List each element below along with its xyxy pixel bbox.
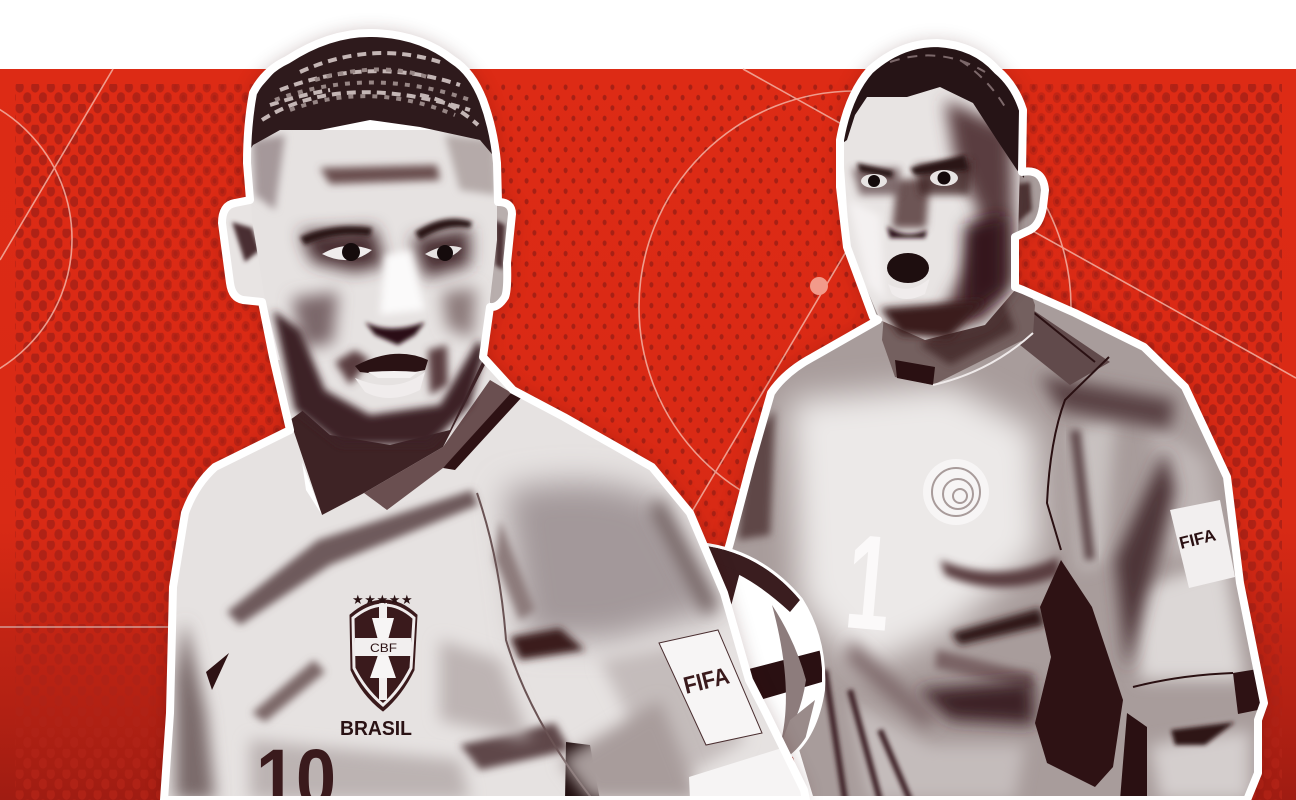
CBF crest: CBF [370,641,397,655]
FIFA patch right [1170,500,1235,588]
FIFA patch right: FIFA [1177,526,1218,553]
CBF crest [350,592,417,711]
Neymar shirt [160,360,820,800]
white top band [0,0,1296,69]
player: Neymar (left) [160,30,820,800]
Neymar hair [251,37,492,154]
pitch lines [0,69,1296,627]
sleeve band [689,749,801,796]
FIFA sleeve patch [659,630,762,745]
goalkeeper neck and collar [882,291,1035,386]
goalkeeper badge [923,459,989,525]
goalkeeper eyes and brows [857,155,968,188]
player: goalkeeper (right) [720,38,1280,800]
goalkeeper ear [1018,175,1041,231]
goalkeeper hair [844,47,1024,178]
shirt number 1: 1 [840,505,898,659]
Neymar neck and collar [292,362,520,515]
Neymar ears [226,204,508,304]
BRASIL text: BRASIL [340,718,412,740]
Neymar face [248,130,497,445]
ball [707,543,826,758]
Neymar eyes and brows [300,219,472,261]
CBF crest: ★★★★★ [352,592,413,607]
goalkeeper shirt [720,285,1280,800]
goalkeeper face [838,85,1022,340]
goalkeeper mouth [887,253,930,299]
Neymar mouth [355,354,428,398]
pitch centre spot [810,277,828,295]
FIFA sleeve patch: FIFA [681,662,732,700]
